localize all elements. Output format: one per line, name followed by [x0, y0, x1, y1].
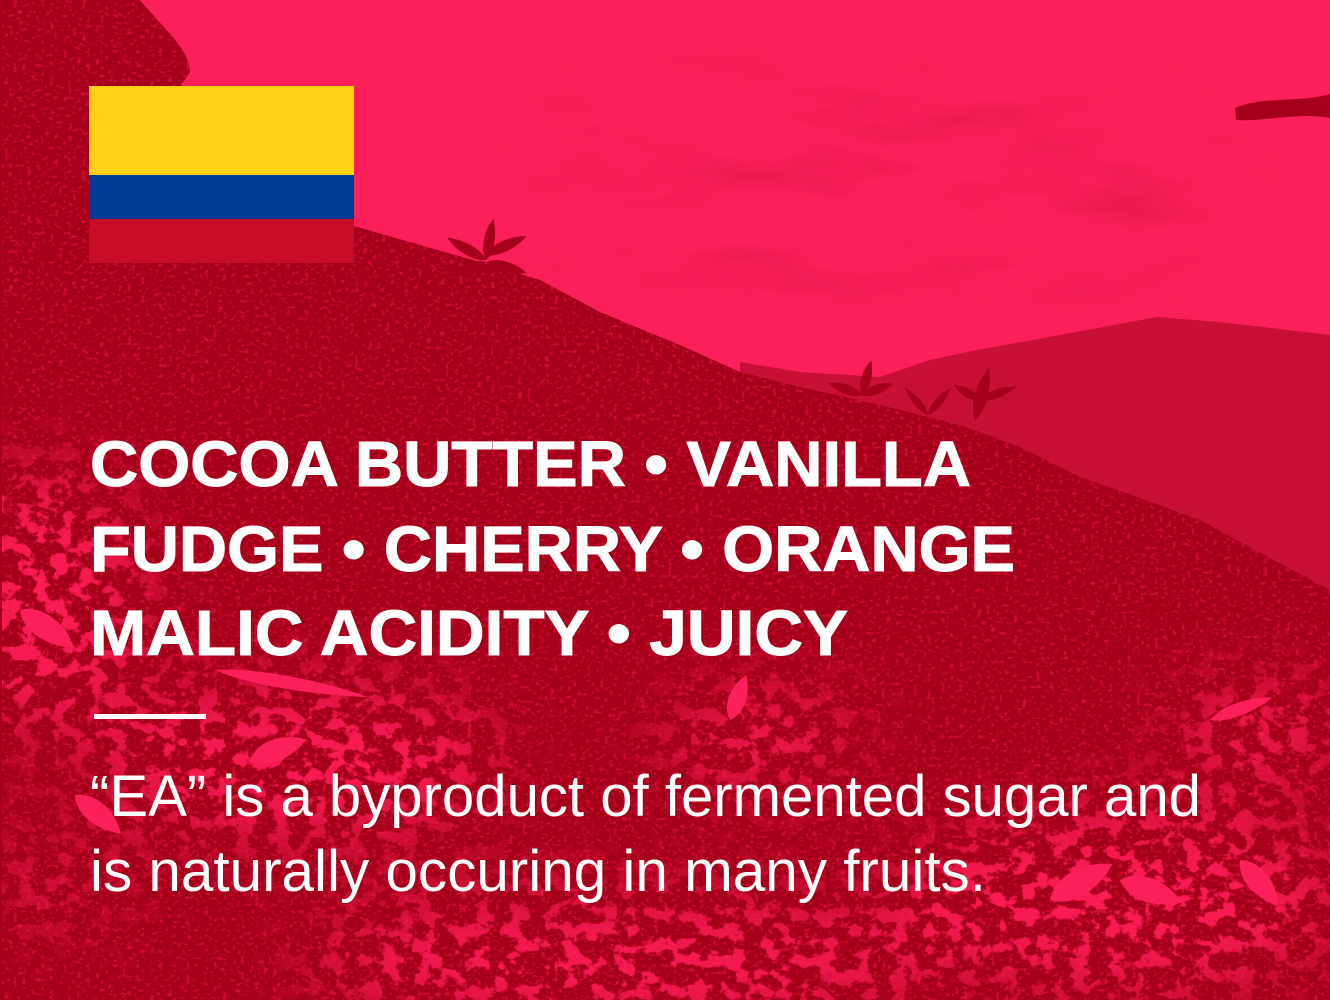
heading: flavour notes: FUDGE • CHERRY • ORANGE [90, 513, 1015, 585]
body text: EA description [90, 764, 1201, 904]
heading: flavour notes [90, 428, 1015, 669]
heading: flavour notes: MALIC ACIDITY • JUICY [90, 597, 848, 669]
body text: EA description: “EA” is a byproduct of fermented sugar and [90, 764, 1201, 829]
palm silhouettes on ridge [444, 218, 1018, 422]
heading: flavour notes: COCOA BUTTER • VANILLA [90, 428, 971, 500]
foreground leaves [13, 600, 1287, 913]
short divider rule [94, 714, 206, 719]
distant mountain [740, 317, 1330, 600]
sky clouds [688, 94, 1180, 289]
icon: Colombian flag [89, 86, 354, 263]
left edge strip [0, 0, 2, 1000]
body text: EA description: is naturally occuring in many fruits. [90, 839, 986, 904]
branch top right [1235, 94, 1330, 120]
